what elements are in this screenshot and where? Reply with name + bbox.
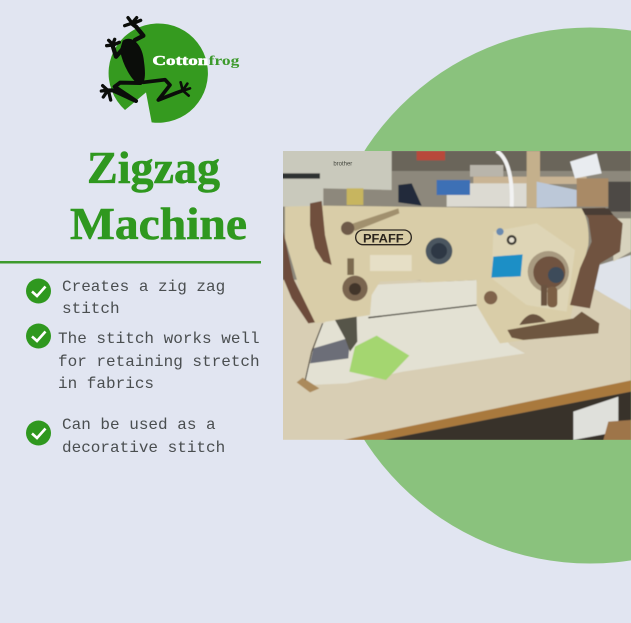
- decorative green circle: [322, 28, 631, 564]
- table: [280, 278, 631, 440]
- lever and tension: [348, 208, 399, 231]
- logo: Cottonfrog: [101, 18, 240, 123]
- stitch dial: [528, 251, 569, 292]
- workshop background: [283, 151, 631, 280]
- PFAFF badge: PFAFF: [363, 231, 404, 245]
- background machine: [283, 151, 392, 208]
- icon: check 1: [26, 278, 51, 304]
- logo wordmark: Cotton: [152, 53, 209, 68]
- logo lily pad: [109, 23, 208, 123]
- brown end cap: [283, 232, 315, 323]
- text: feature 2: in fabrics: [58, 375, 154, 393]
- text: feature 1: stitch: [62, 300, 120, 318]
- text: feature 3: decorative stitch: [62, 439, 225, 457]
- title underline: [0, 261, 261, 264]
- brown hand wheel: [570, 208, 623, 308]
- title: Zigzag: [87, 142, 220, 193]
- needle and foot: [335, 317, 357, 352]
- icon: frog: [101, 18, 190, 101]
- title: [70, 142, 247, 249]
- list: features: [26, 278, 260, 457]
- plate and dial: [370, 255, 412, 271]
- background machine brand: brother: [333, 162, 352, 168]
- machine arm: [285, 206, 589, 343]
- text: feature 2: The stitch works well: [58, 330, 260, 348]
- title: Machine: [70, 198, 247, 249]
- table wood edge and shadow below: [343, 380, 631, 440]
- logo wordmark: [152, 53, 240, 68]
- green fabric: [349, 336, 409, 380]
- knee plate: [507, 312, 599, 340]
- photo: Pfaff sewing machine: [280, 145, 631, 440]
- icon: check 2: [26, 324, 51, 348]
- text: feature 2: for retaining stretch: [58, 353, 260, 371]
- blue label: [491, 254, 523, 278]
- PFAFF badge: [356, 230, 411, 245]
- text: feature 3: Can be used as a: [62, 416, 216, 434]
- icon: check 3: [26, 420, 51, 446]
- logo wordmark: frog: [209, 53, 240, 68]
- white right side: [594, 254, 631, 310]
- text: feature 1: Creates a zig zag: [62, 278, 225, 296]
- machine bed plate: [305, 280, 525, 385]
